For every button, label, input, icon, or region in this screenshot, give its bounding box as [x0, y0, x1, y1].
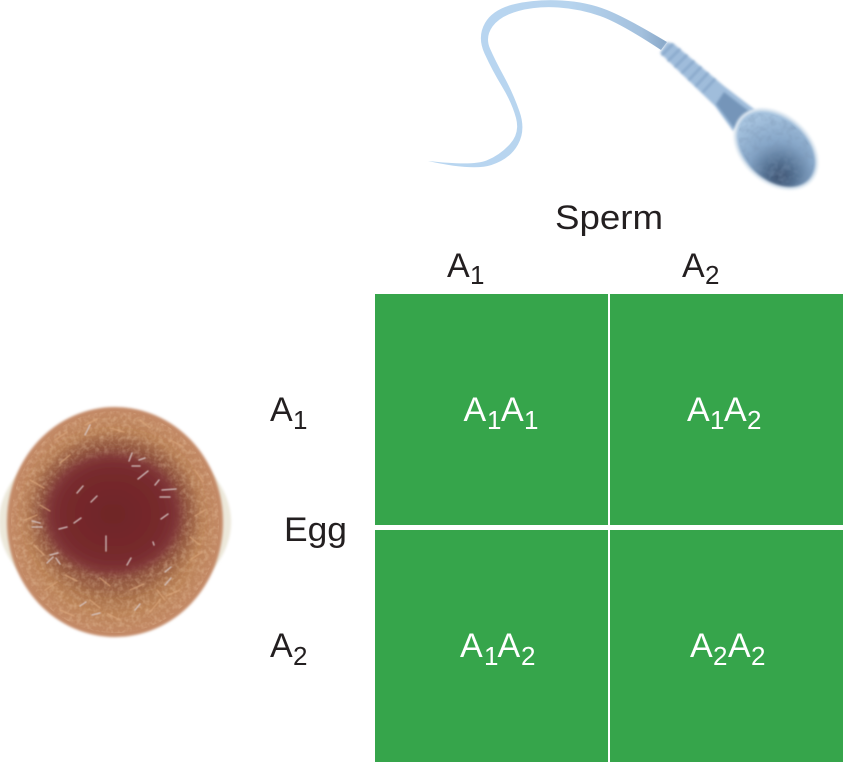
cell: bottom-right [610, 530, 843, 762]
cell: bottom-left [375, 530, 608, 762]
label: sperm allele A1: 1 [470, 260, 484, 290]
punnett square grid [375, 294, 843, 762]
cell: top-right [610, 294, 843, 525]
genotype A1A2 bottom left: A [498, 627, 520, 665]
label: egg allele A1: A [270, 391, 293, 429]
egg pale halo [0, 434, 231, 610]
egg surface fibres [25, 419, 205, 620]
genotype A1A2 bottom left: 1 [484, 641, 498, 671]
egg dark ring shading [33, 441, 193, 585]
genotype A1A2 top right [687, 391, 761, 435]
label: egg allele A2: A [270, 627, 293, 665]
icon: egg cell [0, 407, 231, 637]
genotype A2A2: A [690, 627, 713, 665]
sperm midpiece [660, 42, 755, 131]
sperm tail [428, 0, 667, 167]
label: sperm allele A1: A [447, 247, 470, 285]
genotype A2A2 [690, 627, 765, 671]
genotype A1A1: A [501, 391, 524, 429]
cell: top-left [375, 294, 608, 525]
genotype A1A2 top right: 2 [747, 405, 761, 435]
genotype A2A2: A [728, 627, 751, 665]
genotype A1A1: 1 [524, 405, 538, 435]
genotype A2A2: 2 [751, 641, 765, 671]
label: egg allele A2: 2 [293, 641, 307, 671]
genotype A1A2 top right: 1 [710, 405, 724, 435]
label: Sperm: Sperm [555, 199, 663, 237]
genotype A1A2 bottom left: A [460, 627, 483, 665]
label: sperm allele A2: A [682, 247, 705, 285]
genotype A1A1: A [464, 391, 486, 429]
egg outer ring [7, 407, 223, 637]
label: sperm allele A2 [682, 247, 719, 290]
genotype A1A2 bottom left [460, 627, 535, 671]
genotype A1A1 [464, 391, 538, 435]
genotype A1A2 bottom left: 2 [521, 641, 535, 671]
label: sperm allele A1 [447, 247, 484, 290]
sperm head texture [725, 99, 827, 199]
label: egg allele A1 [270, 391, 307, 435]
icon: sperm cell [428, 0, 834, 206]
egg grain texture [11, 411, 219, 633]
label: Egg: Egg [284, 511, 347, 549]
genotype A1A2 top right: A [687, 391, 710, 429]
genotype A2A2: 2 [713, 641, 727, 671]
label: sperm allele A2: 2 [705, 260, 719, 290]
genotype A1A1: 1 [487, 405, 501, 435]
egg nucleus [45, 454, 181, 574]
sperm head [718, 92, 834, 206]
label: egg allele A2 [270, 627, 307, 671]
genotype A1A2 top right: A [724, 391, 747, 429]
label: egg allele A1: 1 [293, 405, 307, 435]
